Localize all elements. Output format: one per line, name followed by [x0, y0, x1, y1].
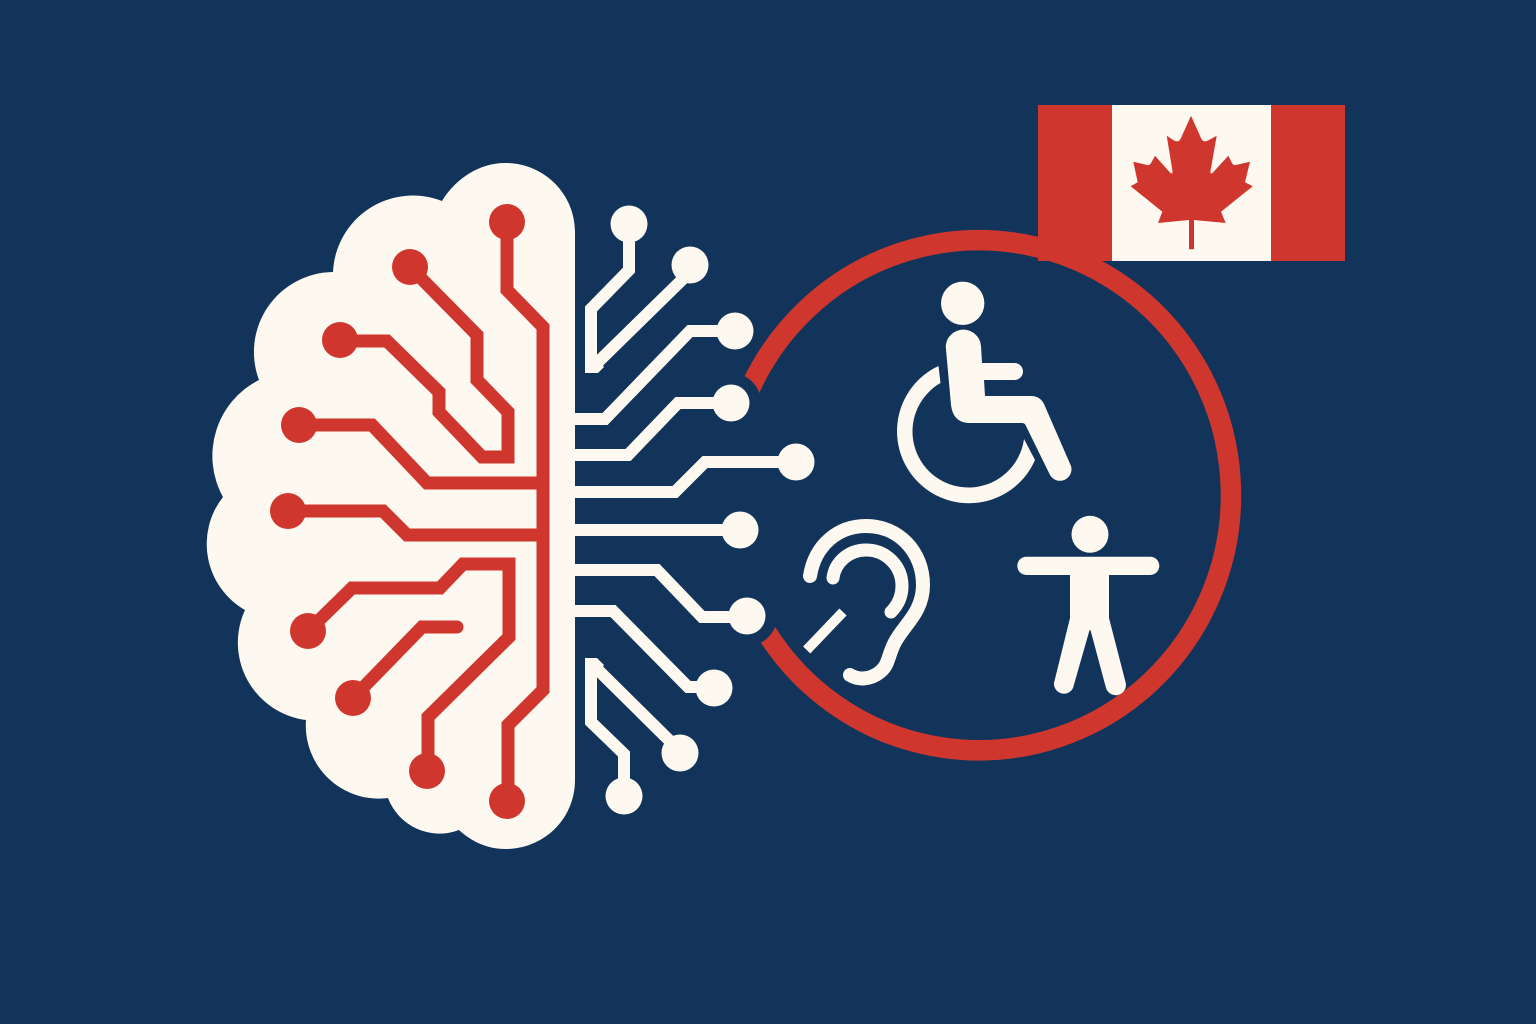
icon: ear with hearing slash: [807, 526, 923, 678]
red circuit nodes: [270, 204, 525, 819]
brain with circuit traces: [207, 163, 575, 849]
cream circuit traces and nodes leaving the brain: [574, 206, 814, 814]
red accessibility ring: [701, 240, 1231, 750]
icon: Canadian flag: [1038, 105, 1345, 261]
icon: wheelchair user: [897, 282, 1071, 503]
icon: maple leaf: [1131, 116, 1253, 249]
cream circuit lines: [574, 224, 796, 796]
icon: standing person with arms outstretched: [1017, 516, 1159, 695]
cream circuit nodes: [606, 206, 814, 814]
brain silhouette: [207, 163, 575, 849]
red circuit lines: [288, 222, 543, 801]
flat trace corners: [585, 355, 604, 677]
